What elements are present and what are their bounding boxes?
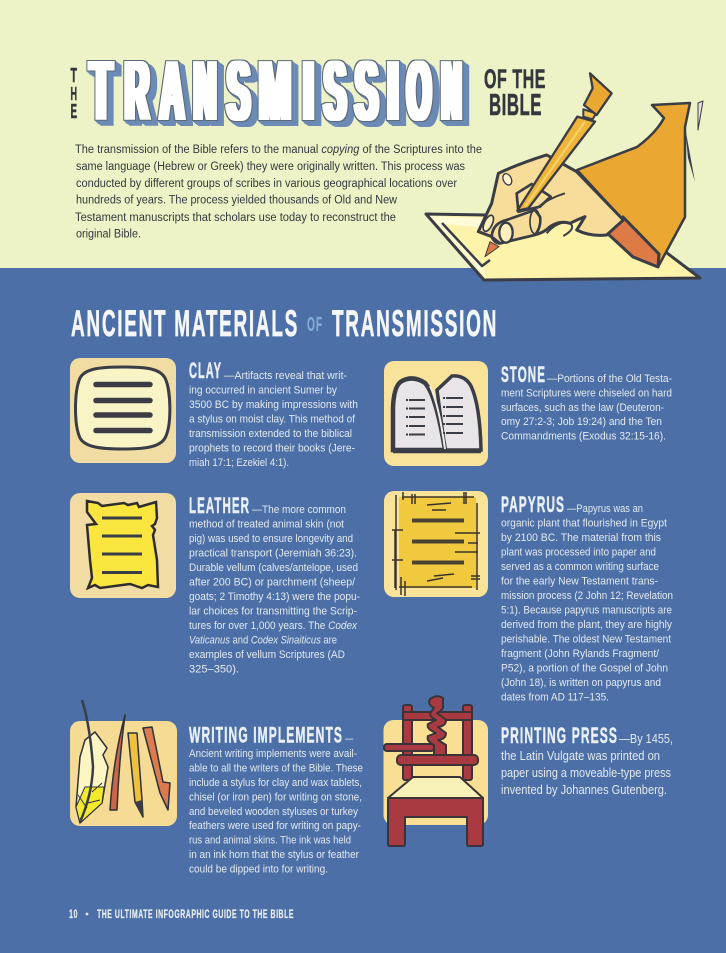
text: clay: prophets to record their books (Jere- bbox=[189, 442, 355, 454]
title: transmission: A bbox=[160, 44, 184, 139]
text: papyrus: served as a common writing surface bbox=[501, 561, 659, 573]
intro text block: conducted by different groups of scribes in various geographical locations over bbox=[76, 178, 457, 190]
text: papyrus: 5:1). Because papyrus manuscripts are bbox=[501, 604, 672, 616]
footer: page number and book title: THE ULTIMATE INFOGRAPHIC GUIDE TO THE BIBLE bbox=[97, 909, 294, 921]
text: clay: —Artifacts reveal that writ- bbox=[224, 370, 347, 382]
text: leather: tures for over 1,000 years. The Codex bbox=[189, 620, 357, 632]
intro text block: hundreds of years. The process yielded thousands of Old and New bbox=[76, 194, 398, 206]
text: writing implements: include a stylus for clay and wax tablets, bbox=[189, 777, 362, 789]
text: clay: 3500 BC by making impressions with bbox=[189, 399, 358, 411]
text: printing press: invented by Johannes Gutenberg. bbox=[501, 783, 667, 797]
text: stone: ment Scriptures were chiseled on hard bbox=[501, 388, 672, 400]
text: leather bbox=[189, 493, 360, 676]
icon: papyrus sheet bbox=[384, 491, 488, 597]
background: blue body panel bbox=[0, 268, 726, 953]
icon: clay tablet bbox=[70, 358, 176, 463]
title: transmission: I bbox=[303, 44, 314, 139]
panel: stone bbox=[384, 361, 672, 466]
brush bbox=[485, 73, 612, 257]
title: transmission: I bbox=[387, 44, 399, 139]
text: papyrus: P52), a portion of the Gospel of John bbox=[501, 662, 668, 674]
panel: clay bbox=[70, 358, 358, 469]
text: papyrus: —Papyrus was an bbox=[567, 503, 643, 515]
text: writing implements: and beveled wooden styluses or turkey bbox=[189, 806, 358, 818]
text: leather: lar choices for transmitting the Scrip- bbox=[189, 606, 357, 618]
intro text block: original Bible. bbox=[76, 228, 141, 240]
title: the (vertical) bbox=[70, 65, 78, 123]
heading: ancient materials of transmission: ANCIENT MATERIALS bbox=[71, 303, 299, 344]
text: clay: transmission extended to the biblical bbox=[189, 428, 352, 440]
text: stone: —Portions of the Old Testa- bbox=[547, 373, 672, 385]
panel: writing implements bbox=[70, 700, 363, 876]
text: leather: Durable vellum (calves/antelope, used bbox=[189, 562, 358, 574]
text: stone: Commandments (Exodus 32:15-16). bbox=[501, 430, 666, 442]
text: printing press: —By 1455, bbox=[619, 732, 673, 746]
text: leather: —The more common bbox=[252, 504, 346, 516]
title: of the bible: BIBLE bbox=[489, 87, 542, 122]
background: cream header band bbox=[0, 0, 726, 268]
intro text block bbox=[75, 144, 482, 240]
title: transmission: M bbox=[259, 44, 291, 139]
text: writing implements: — bbox=[345, 733, 353, 745]
title: transmission: N bbox=[194, 44, 216, 139]
text: printing press bbox=[501, 723, 673, 797]
title: of the bible bbox=[484, 64, 546, 122]
text: leather: goats; 2 Timothy 4:13) were the popu- bbox=[189, 591, 360, 603]
text: printing press: paper using a moveable-type press bbox=[501, 766, 671, 780]
intro text block: same language (Hebrew or Greek) they were originally written. This process was bbox=[76, 161, 465, 173]
text: writing implements bbox=[189, 722, 363, 876]
text: papyrus: by 2100 BC. The material from this bbox=[501, 532, 661, 544]
title: transmission: S bbox=[355, 44, 378, 139]
panel: papyrus bbox=[384, 491, 673, 704]
text: papyrus: fragment (John Rylands Fragment/ bbox=[501, 648, 660, 660]
icon: hand writing with brush on paper bbox=[426, 73, 703, 280]
title: transmission: S bbox=[227, 44, 250, 139]
footer: page number and book title: 10 bbox=[69, 909, 78, 921]
text: clay bbox=[189, 358, 358, 469]
text: writing implements: Ancient writing implements were avail- bbox=[189, 748, 357, 760]
text: writing implements: feathers were used for writing on papy- bbox=[189, 820, 361, 832]
title: the (vertical): T bbox=[70, 65, 78, 87]
footer: page number and book title bbox=[69, 909, 294, 921]
text: stone: omy 27:2-3; Job 19:24) and the Ten bbox=[501, 416, 662, 428]
text: leather: after 200 BC) or parchment (sheep/ bbox=[189, 576, 356, 588]
title: transmission: T bbox=[90, 44, 112, 139]
text: writing implements: in an ink horn that the stylus or feather bbox=[189, 849, 359, 861]
text: papyrus: mission process (2 John 12; Revelation bbox=[501, 590, 673, 602]
heading: ancient materials of transmission: OF bbox=[307, 314, 323, 336]
text: papyrus: for the early New Testament trans- bbox=[501, 576, 658, 588]
icon: leather scroll bbox=[70, 493, 176, 598]
title: the (vertical): H bbox=[70, 84, 78, 104]
text: leather: method of treated animal skin (not bbox=[189, 518, 344, 530]
text: writing implements: could be dipped into for writing. bbox=[189, 864, 328, 876]
text: stone: surfaces, such as the law (Deuteron- bbox=[501, 402, 664, 414]
text: writing implements: able to all the writers of the Bible. These bbox=[189, 762, 363, 774]
title: transmission bbox=[90, 44, 461, 139]
title: transmission: R bbox=[125, 44, 149, 139]
heading: ancient materials of transmission: TRANSMISSION bbox=[332, 303, 498, 344]
text: leather: Vaticanus and Codex Sinaiticus are bbox=[189, 634, 337, 646]
text: clay: ing occurred in ancient Sumer by bbox=[189, 384, 337, 396]
intro text block: Testament manuscripts that scholars use today to reconstruct the bbox=[75, 212, 396, 224]
panel: printing press bbox=[384, 696, 673, 846]
text: papyrus: perishable. The oldest New Testament bbox=[501, 634, 671, 646]
text: papyrus bbox=[501, 492, 673, 704]
text: papyrus: plant was processed into paper and bbox=[501, 546, 656, 558]
sleeve bbox=[577, 101, 703, 267]
text: stone: STONE bbox=[501, 362, 546, 387]
text: leather: 325–350). bbox=[189, 664, 239, 676]
text: writing implements: chisel (or iron pen) for writing on stone, bbox=[189, 792, 362, 804]
title: of the bible: OF THE bbox=[484, 64, 546, 94]
text: printing press: PRINTING PRESS bbox=[501, 723, 618, 748]
text: papyrus: organic plant that flourished in Egypt bbox=[501, 518, 667, 530]
text: clay: miah 17:1; Ezekiel 4:1). bbox=[189, 457, 289, 469]
text: papyrus: PAPYRUS bbox=[501, 492, 565, 517]
text: papyrus: (John 18), is written on papyrus and bbox=[501, 677, 661, 689]
icon: printing press bbox=[384, 696, 488, 846]
text: leather: practical transport (Jeremiah 36:23). bbox=[189, 548, 357, 560]
icon: feather and styluses bbox=[70, 700, 177, 826]
title: transmission: O bbox=[407, 44, 431, 139]
text: clay: a stylus on moist clay. This method of bbox=[189, 414, 356, 426]
icon: stone tablets bbox=[384, 361, 488, 466]
text: leather: examples of vellum Scriptures (AD bbox=[189, 649, 345, 661]
text: leather: LEATHER bbox=[189, 493, 250, 518]
text: leather: pig) was used to ensure longevity and bbox=[189, 533, 353, 545]
hand bbox=[478, 155, 623, 243]
text: stone bbox=[501, 362, 672, 442]
cuff bbox=[607, 217, 659, 267]
text: papyrus: derived from the plant, they are highly bbox=[501, 619, 672, 631]
text: printing press: the Latin Vulgate was printed on bbox=[501, 749, 660, 763]
text: writing implements: WRITING IMPLEMENTS bbox=[189, 722, 343, 748]
paper sheet bbox=[426, 214, 700, 280]
text: papyrus: dates from AD 117–135. bbox=[501, 692, 609, 704]
panel: leather bbox=[70, 493, 360, 676]
text: N bbox=[442, 44, 461, 139]
intro text block: The transmission of the Bible refers to the manual copying of the Scriptures into the bbox=[75, 144, 482, 156]
text: writing implements: rus and animal skins. The ink was held bbox=[189, 834, 351, 846]
title: transmission: S bbox=[324, 44, 346, 139]
text: E bbox=[70, 101, 78, 123]
text: clay: CLAY bbox=[189, 358, 222, 383]
